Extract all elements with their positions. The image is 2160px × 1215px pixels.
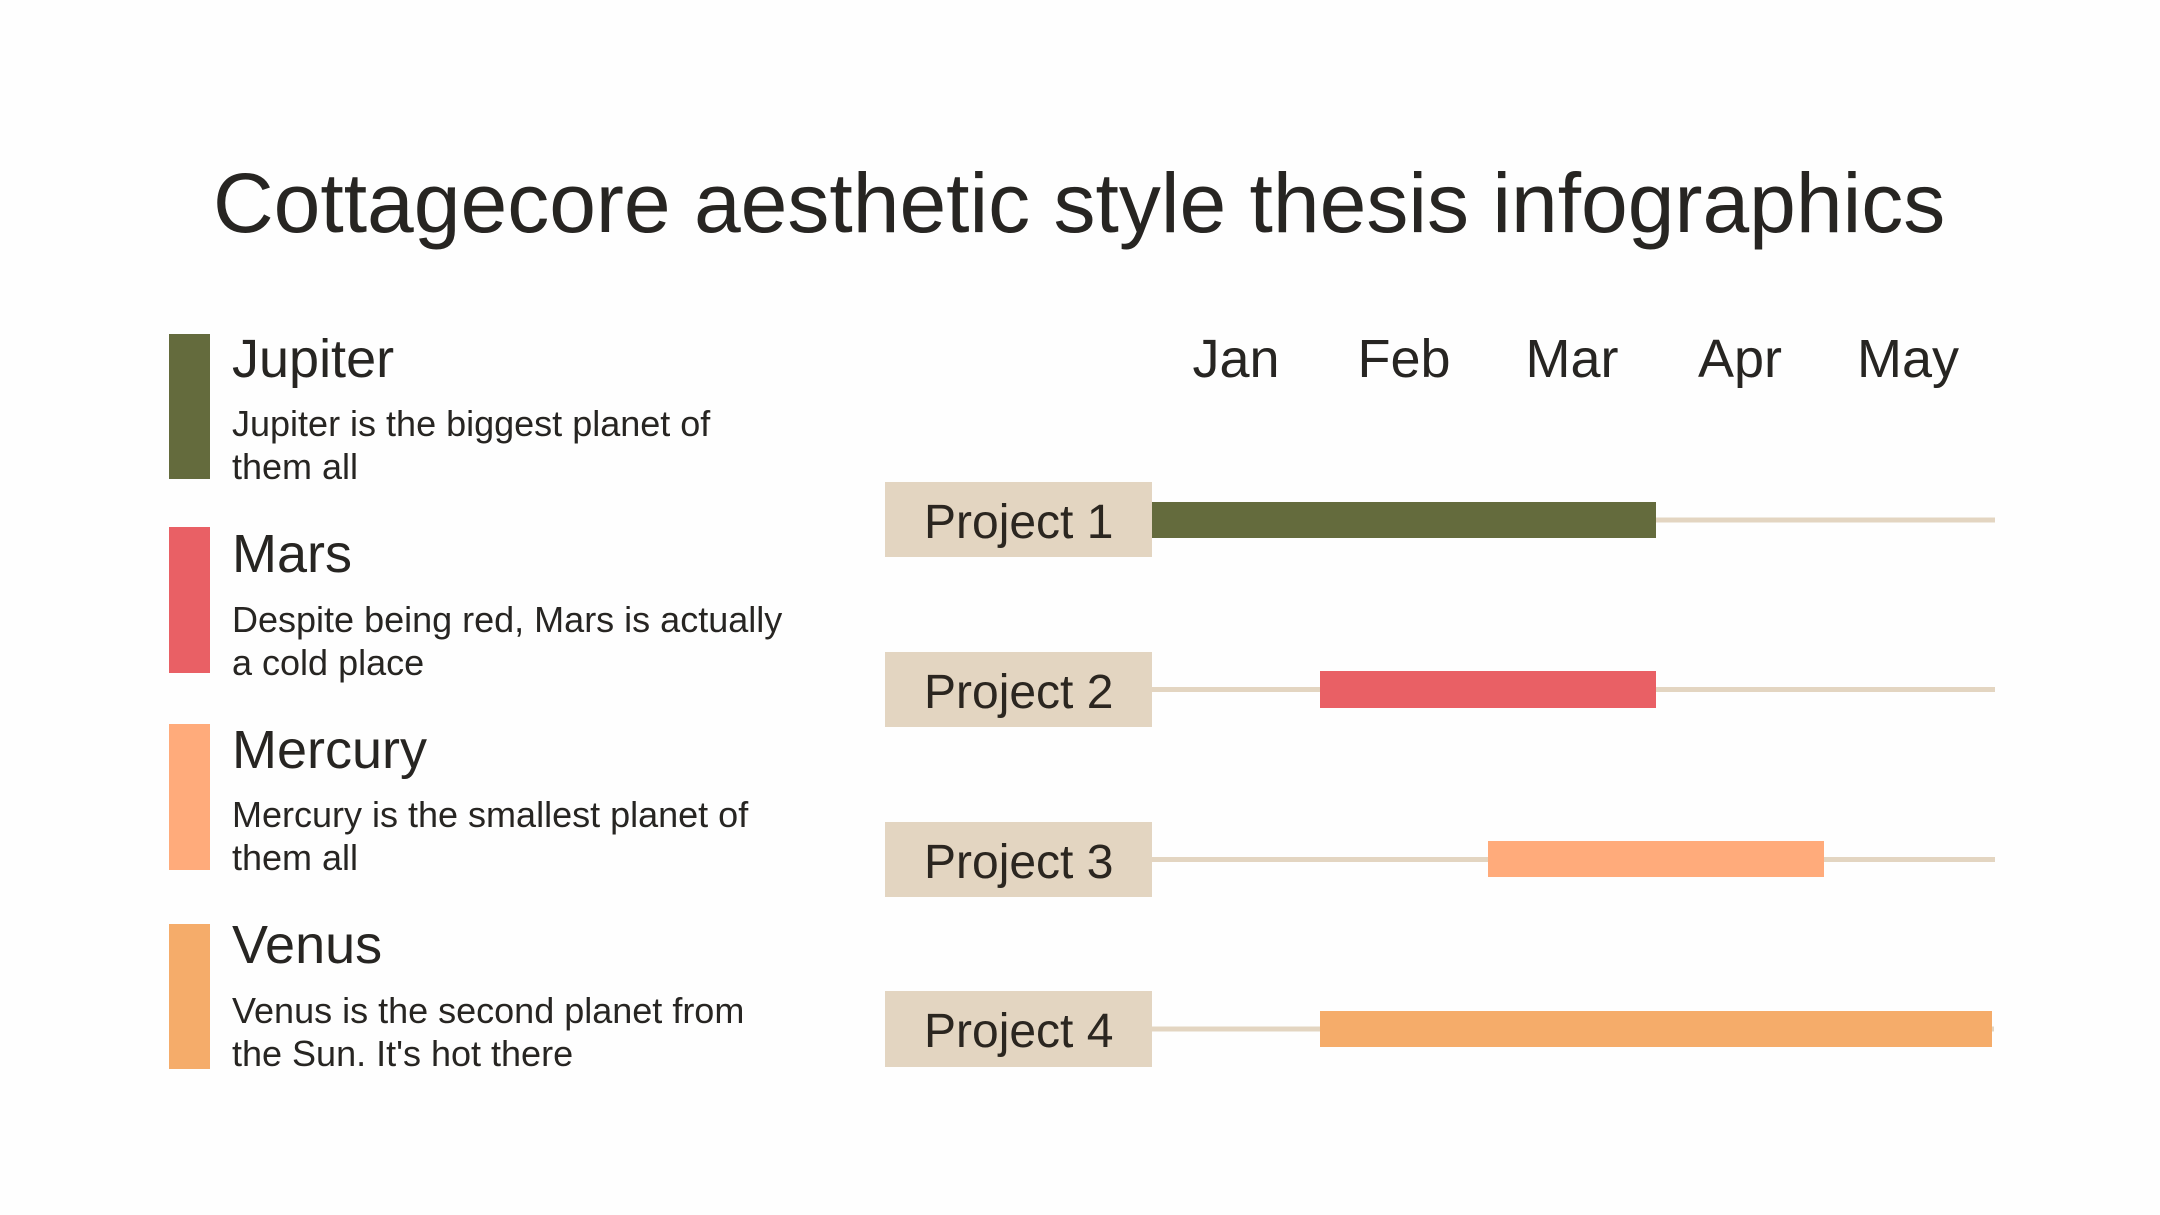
row: Project 4	[885, 991, 1994, 1067]
swatch: Mars	[169, 527, 210, 673]
label: Project 4: Project 4	[924, 1005, 1113, 1058]
row: Project 1	[885, 482, 1995, 557]
month labels: Jan	[1192, 329, 1280, 389]
text: Mars description: Despite being red, Mars is actually	[232, 599, 782, 640]
label: Project 1	[885, 482, 1152, 557]
panel: legend	[169, 329, 782, 1074]
row: Project 3	[885, 822, 1995, 897]
row: Project 2	[885, 652, 1995, 727]
heading: Jupiter: Jupiter	[232, 329, 394, 389]
bar: Project 3 Mar to Apr	[1488, 841, 1824, 877]
legend item: Mars	[169, 524, 782, 683]
bar: Project 1 Jan to Mar	[1152, 502, 1656, 538]
label: Project 4	[885, 991, 1152, 1067]
bar: Project 2 Feb to Mar	[1320, 671, 1656, 708]
heading: Venus: Venus	[232, 915, 382, 975]
bar: Project 4 Feb to May	[1320, 1011, 1992, 1047]
swatch: Mercury	[169, 724, 210, 870]
label: Project 1: Project 1	[924, 496, 1113, 549]
heading: Mars: Mars	[232, 524, 352, 584]
month labels: May	[1857, 329, 1959, 389]
gantt chart	[885, 329, 1995, 1067]
text: Venus description: the Sun. It's hot there	[232, 1033, 573, 1074]
legend item: Venus	[169, 915, 744, 1074]
label: Project 2	[885, 652, 1152, 727]
text: Mars description: a cold place	[232, 642, 424, 683]
month labels: Mar	[1526, 329, 1619, 389]
heading: Mercury: Mercury	[232, 720, 427, 780]
title: Cottagecore aesthetic style thesis infographics	[213, 156, 1945, 250]
label: Project 3	[885, 822, 1152, 897]
month labels	[1192, 329, 1959, 389]
text: Venus description: Venus is the second planet from	[232, 990, 744, 1031]
month labels: Feb	[1357, 329, 1451, 389]
swatch: Venus	[169, 924, 210, 1069]
label: Project 3: Project 3	[924, 836, 1113, 889]
legend item: Jupiter	[169, 329, 711, 487]
legend item: Mercury	[169, 720, 749, 878]
label: Project 2: Project 2	[924, 666, 1113, 719]
month labels: Apr	[1698, 329, 1782, 389]
swatch: Jupiter	[169, 334, 210, 479]
text: Jupiter description: them all	[232, 446, 358, 487]
text: Mercury description: them all	[232, 837, 358, 878]
text: Mercury description: Mercury is the smallest planet of	[232, 794, 749, 835]
text: Jupiter description: Jupiter is the biggest planet of	[232, 403, 711, 444]
